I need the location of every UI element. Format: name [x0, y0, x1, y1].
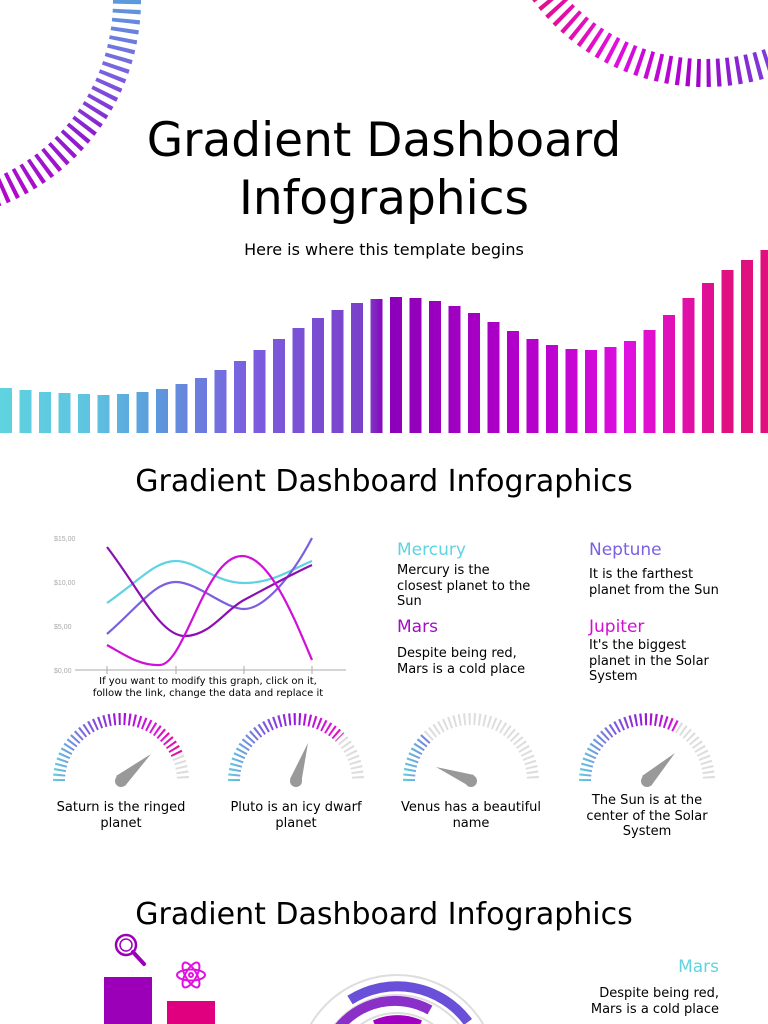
line chart: $10,00 [54, 580, 76, 587]
bar: purple [104, 977, 152, 1024]
line chart: $15,00 [54, 536, 76, 543]
text block: Mars [397, 617, 525, 676]
text: The Sun is at the center of the Solar System [586, 793, 708, 839]
text: Venus has a beautiful name [401, 800, 541, 830]
line chart [54, 536, 346, 675]
chart caption: If you want to modify this graph, click on it, follow the link, change the data and replace it [93, 676, 323, 699]
decorative arc: top right [504, 0, 768, 73]
subtitle: Here is where this template begins [244, 240, 524, 259]
gauge labels: Saturn is the ringed planet [57, 800, 185, 830]
radial chart [297, 975, 497, 1024]
gauges [53, 713, 715, 787]
text block: Neptune: It is the farthest planet from the Sun [589, 567, 719, 598]
title: Gradient Dashboard [147, 113, 621, 168]
text block: Mercury [397, 540, 530, 609]
gauge: Pluto [234, 719, 358, 787]
bar: pink [167, 1001, 215, 1024]
section heading 2: Gradient Dashboard Infographics [135, 897, 633, 932]
text block: Mars (bottom) [591, 957, 719, 1016]
text block: Mercury: Mercury [397, 540, 466, 560]
title: Infographics [239, 171, 529, 226]
text block: Jupiter: Jupiter [589, 617, 644, 637]
text block: Mars: Mars [397, 617, 438, 637]
text block: Neptune: Neptune [589, 540, 662, 560]
icon: atom [177, 960, 205, 990]
text block: Mars: Despite being red, Mars is a cold place [397, 646, 525, 676]
line chart: $0,00 [54, 668, 72, 675]
text block: Jupiter: It's the biggest planet in the Solar System [589, 638, 709, 684]
wave bar chart [0, 250, 768, 433]
line chart: $5,00 [54, 624, 72, 631]
text block: Mars (bottom): Despite being red, [599, 986, 719, 1001]
icon: magnifier [116, 935, 144, 964]
gauge: Sun [585, 719, 709, 787]
gauge: Saturn [59, 719, 183, 787]
title [147, 113, 621, 226]
text block: Neptune [589, 540, 719, 598]
text block: Jupiter [588, 617, 709, 684]
text block: Mars (bottom): Mars is a cold place [591, 1002, 719, 1016]
section heading 1: Gradient Dashboard Infographics [135, 464, 633, 499]
text block: Mercury: Mercury is the closest planet to the Sun [397, 563, 530, 609]
gauge: Venus [409, 719, 533, 787]
text block: Mars (bottom): Mars [678, 957, 719, 977]
text: Pluto is an icy dwarf planet [230, 800, 362, 830]
decorative arc: top left [0, 0, 127, 207]
